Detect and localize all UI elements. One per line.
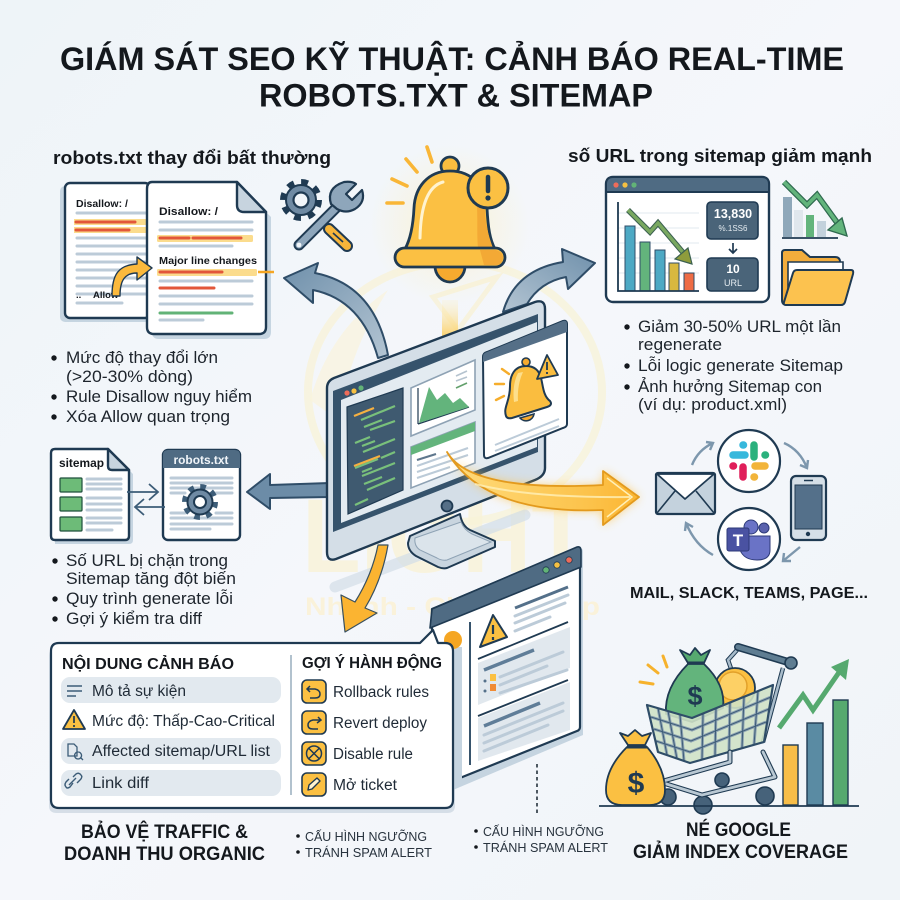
action: disable: Disable rule bbox=[333, 746, 413, 763]
action: rollback bbox=[302, 680, 429, 703]
row: description: Mô tả sự kiện bbox=[92, 683, 186, 700]
icon: teams bbox=[718, 508, 780, 570]
chart panel bbox=[411, 360, 475, 436]
caption: avoid google: GIẢM INDEX COVERAGE bbox=[633, 840, 848, 863]
warning icon bbox=[480, 615, 507, 647]
list: robots.txt: Xóa Allow quan trọng bbox=[66, 408, 230, 426]
panel: alert content bbox=[49, 630, 455, 813]
arrow: glowing yellow to channels bbox=[447, 452, 639, 525]
row: link diff bbox=[61, 770, 281, 796]
list: sitemap bbox=[624, 318, 843, 414]
list: sitemap: Ảnh hưởng Sitemap con bbox=[638, 377, 822, 396]
icon: central alert bell bbox=[370, 145, 530, 305]
icon: robots.txt gear window: robots.txt bbox=[174, 455, 229, 467]
front document: Major line changes bbox=[159, 255, 257, 267]
green money bag bbox=[666, 648, 723, 722]
heading: suggested actions: GỢI Ý HÀNH ĐỘNG bbox=[302, 653, 442, 672]
back document bbox=[60, 183, 150, 322]
list: sitemap: Giảm 30-50% URL một lần bbox=[638, 318, 841, 336]
ground line bbox=[599, 805, 859, 807]
note: threshold left: TRÁNH SPAM ALERT bbox=[305, 845, 432, 860]
small bell bbox=[495, 355, 558, 421]
yellow money bag bbox=[606, 730, 665, 805]
curved yellow arrow bbox=[112, 257, 152, 296]
rays bbox=[640, 656, 667, 684]
basket bbox=[647, 685, 773, 763]
heading: robots.txt: robots.txt thay đổi bất thường bbox=[53, 148, 331, 168]
action: ticket: Mở ticket bbox=[333, 777, 398, 794]
action: revert bbox=[302, 711, 427, 734]
arrow: to sitemap and robots box bbox=[247, 474, 330, 509]
action: rollback: Rollback rules bbox=[333, 684, 429, 701]
caption: protect traffic: DOANH THU ORGANIC bbox=[64, 844, 265, 865]
icon: mail bbox=[656, 473, 715, 514]
list: sitemap and robots: Gợi ý kiểm tra diff bbox=[66, 610, 202, 628]
heading: alert content: NỘI DUNG CẢNH BÁO bbox=[62, 654, 234, 673]
monitor stand bbox=[408, 514, 495, 568]
cart frame bbox=[660, 752, 775, 795]
monitor bbox=[327, 301, 567, 587]
chart: rising bars bbox=[779, 659, 849, 805]
icon: notification channels bbox=[656, 430, 826, 570]
orange badge bbox=[444, 631, 462, 649]
camera button bbox=[442, 500, 452, 512]
list: sitemap and robots bbox=[52, 552, 236, 628]
content block bbox=[478, 682, 570, 761]
content block bbox=[478, 627, 570, 705]
caption: protect traffic: BẢO VỆ TRAFFIC & bbox=[81, 821, 248, 843]
stat box after: URL bbox=[724, 278, 742, 288]
back document: Allow bbox=[93, 290, 119, 301]
window: alert detail bbox=[430, 547, 583, 790]
stat box before: %.1SS6 bbox=[719, 224, 748, 233]
stat box after bbox=[707, 258, 758, 291]
heading: sitemap: số URL trong sitemap giảm mạnh bbox=[568, 146, 872, 166]
front document bbox=[147, 182, 274, 339]
coin bbox=[715, 668, 755, 708]
icon: folder bbox=[782, 250, 853, 305]
caption: protect traffic bbox=[64, 821, 265, 865]
back document: .. bbox=[76, 290, 81, 301]
note: threshold right: TRÁNH SPAM ALERT bbox=[483, 840, 608, 855]
action: disable bbox=[302, 742, 413, 765]
back document: Disallow: / bbox=[76, 198, 128, 210]
arrows: channel cycle bbox=[685, 442, 808, 561]
wheels bbox=[660, 773, 774, 814]
yellow money bag: $ bbox=[628, 767, 645, 800]
icon: teams: T bbox=[733, 531, 744, 550]
window: sitemap chart bbox=[606, 177, 769, 302]
list: sitemap: regenerate bbox=[638, 336, 722, 354]
action: revert: Revert deploy bbox=[333, 715, 427, 732]
watermark logo bbox=[302, 262, 602, 621]
rising trend arrow bbox=[779, 668, 842, 728]
badge bbox=[468, 168, 508, 208]
alert window bbox=[483, 321, 567, 458]
cart handle bbox=[728, 647, 797, 742]
stat box before: 13,830 bbox=[714, 207, 752, 221]
icon: small declining chart bbox=[782, 182, 847, 238]
list: robots.txt bbox=[51, 349, 252, 426]
status card bbox=[411, 422, 475, 488]
icon: sitemap document bbox=[51, 449, 133, 544]
row: affected list: Affected sitemap/URL list bbox=[92, 743, 271, 760]
dashed connector bbox=[536, 764, 538, 813]
arrow: down to alert panel bbox=[341, 545, 388, 632]
icon: sitemap document: sitemap bbox=[59, 456, 104, 470]
row: description bbox=[61, 677, 281, 703]
icon: shopping cart with money bbox=[599, 647, 859, 814]
downward trend arrow bbox=[628, 210, 686, 256]
list: sitemap and robots: Sitemap tăng đột biến bbox=[66, 570, 236, 588]
row: link diff: Link diff bbox=[92, 775, 150, 792]
label: channels: MAIL, SLACK, TEAMS, PAGE... bbox=[630, 585, 868, 602]
watermark logo: LIGHT bbox=[302, 478, 590, 595]
stat box before bbox=[707, 202, 758, 239]
row: affected list bbox=[61, 738, 281, 764]
stat box after: 10 bbox=[726, 262, 740, 276]
note: threshold right bbox=[474, 824, 608, 855]
list: robots.txt: Rule Disallow nguy hiểm bbox=[66, 388, 252, 406]
caption: avoid google bbox=[633, 818, 848, 863]
action: ticket bbox=[302, 773, 398, 796]
arrow: to sitemap bbox=[503, 249, 595, 312]
row: severity: Mức độ: Thấp-Cao-Critical bbox=[92, 713, 275, 730]
note: threshold left bbox=[296, 829, 432, 860]
clapper bbox=[435, 266, 465, 282]
note: threshold right: CẤU HÌNH NGƯỠNG bbox=[483, 824, 604, 839]
caption: avoid google: NÉ GOOGLE bbox=[686, 818, 791, 841]
title: ROBOTS.TXT & SITEMAP bbox=[259, 78, 653, 114]
screen dots bbox=[344, 385, 364, 396]
title bbox=[60, 41, 844, 114]
title: GIÁM SÁT SEO KỸ THUẬT: CẢNH BÁO REAL-TIME bbox=[60, 41, 844, 77]
list: robots.txt: Mức độ thay đổi lớn bbox=[66, 349, 218, 367]
icon: gear and wrench bbox=[284, 182, 363, 247]
icon: phone bbox=[791, 476, 826, 540]
list: sitemap and robots: Số URL bị chặn trong bbox=[66, 552, 228, 570]
list: sitemap and robots: Quy trình generate lỗi bbox=[66, 589, 233, 608]
watermark logo: Nhanh - Chuẩn - Đẹp bbox=[305, 593, 600, 621]
code panel bbox=[347, 388, 403, 514]
list: sitemap: (ví dụ: product.xml) bbox=[638, 396, 787, 414]
arrow: to robots.txt bbox=[284, 263, 388, 358]
bar chart bbox=[618, 202, 699, 291]
list: robots.txt: (>20-30% dòng) bbox=[66, 368, 193, 386]
arrows: sync between documents bbox=[127, 484, 165, 515]
icon: robots.txt gear window bbox=[163, 450, 240, 540]
icon: slack bbox=[718, 430, 780, 492]
note: threshold left: CẤU HÌNH NGƯỠNG bbox=[305, 829, 427, 844]
list: sitemap: Lỗi logic generate Sitemap bbox=[638, 356, 843, 375]
icon: robots.txt documents bbox=[60, 182, 274, 339]
down arrow bbox=[729, 243, 737, 253]
front document: Disallow: / bbox=[159, 206, 218, 218]
green money bag: $ bbox=[687, 681, 703, 711]
